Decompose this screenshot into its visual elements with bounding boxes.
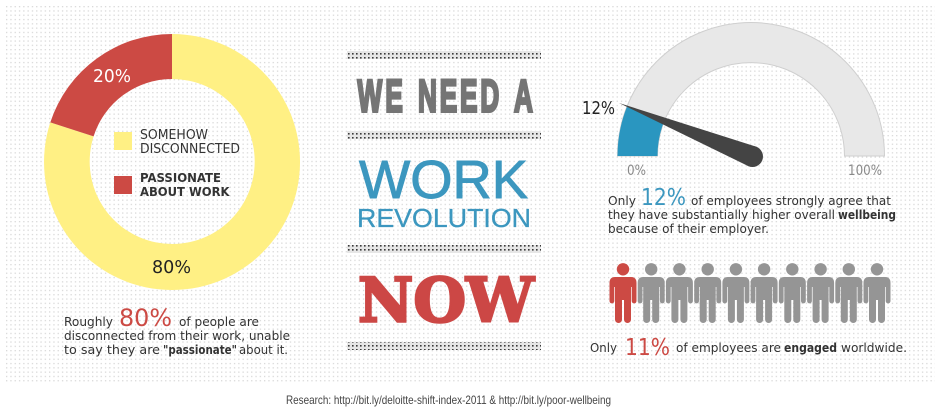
donut segment: 80% yellow [44,34,300,290]
label: 20%: 20% [93,67,131,87]
gauge value: 12% blue [618,107,664,156]
gauge track [618,22,884,156]
text block: roughly 80%: 80% [119,304,172,332]
legend: somehow disconnected: SOMEHOW [140,128,208,143]
panel: gauge [582,22,884,179]
text block: only 11%: engaged [784,340,837,355]
text block: only 12%: because of their employer. [608,221,769,236]
heading: we need a: WE [358,71,403,121]
text block: only 12%: they have substantially higher overall [608,207,835,222]
heading: we need a: NEED [418,71,499,121]
text block: roughly 80%: "passionate" [163,342,237,357]
label: 80%: 80% [152,258,191,278]
text block: only 12% [608,185,896,236]
panel: people row [610,263,890,323]
text block: only 12%: wellbeing [838,207,896,222]
divider bar [347,342,541,350]
text block: only 11%: 11% [625,335,670,361]
text block: roughly 80%: disconnected from their work, unable [64,328,290,343]
panel: donut chart [44,34,300,290]
legend: somehow disconnected [114,128,240,157]
text block: roughly 80%: of people are [179,314,259,329]
legend: passionate about work [114,170,231,199]
label: 100%: 100% [848,163,882,179]
research footer: Research: http://bit.ly/deloitte-shift-index-2011 & http://bit.ly/poor-wellbeing [286,393,611,407]
heading: work: WORK [359,150,528,210]
text block: only 12%: 12% [641,185,686,211]
icon: red person [610,263,636,323]
text block: only 12%: Only [608,193,637,208]
text block: roughly 80% [64,304,290,357]
text block: only 11%: of employees are [676,340,781,355]
heading: now: NOW [358,266,535,337]
panel: center headline [347,51,541,350]
divider bar [347,245,541,253]
text block: roughly 80%: Roughly [64,314,114,329]
heading: revolution: REVOLUTION [357,203,531,233]
heading: we need a: A [514,71,533,121]
legend: passionate about work: ABOUT WORK [140,184,231,199]
text block: only 11%: Only [590,340,618,355]
legend: passionate about work: PASSIONATE [140,170,221,185]
text block: roughly 80%: about it. [239,342,288,357]
legend: somehow disconnected: DISCONNECTED [140,142,240,157]
text block: only 11% [590,335,907,361]
divider bar [347,51,541,59]
gauge needle [619,103,763,167]
heading: we need a [358,71,533,121]
text block: only 12%: of employees strongly agree that [691,193,891,208]
label: 0%: 0% [627,163,646,179]
donut segment: 20% red [50,34,172,136]
label: 12%: 12% [582,99,615,119]
text block: roughly 80%: to say they are [64,342,160,357]
divider bar [347,131,541,139]
text block: only 11%: worldwide. [841,340,907,355]
icons: grey people [638,263,890,323]
